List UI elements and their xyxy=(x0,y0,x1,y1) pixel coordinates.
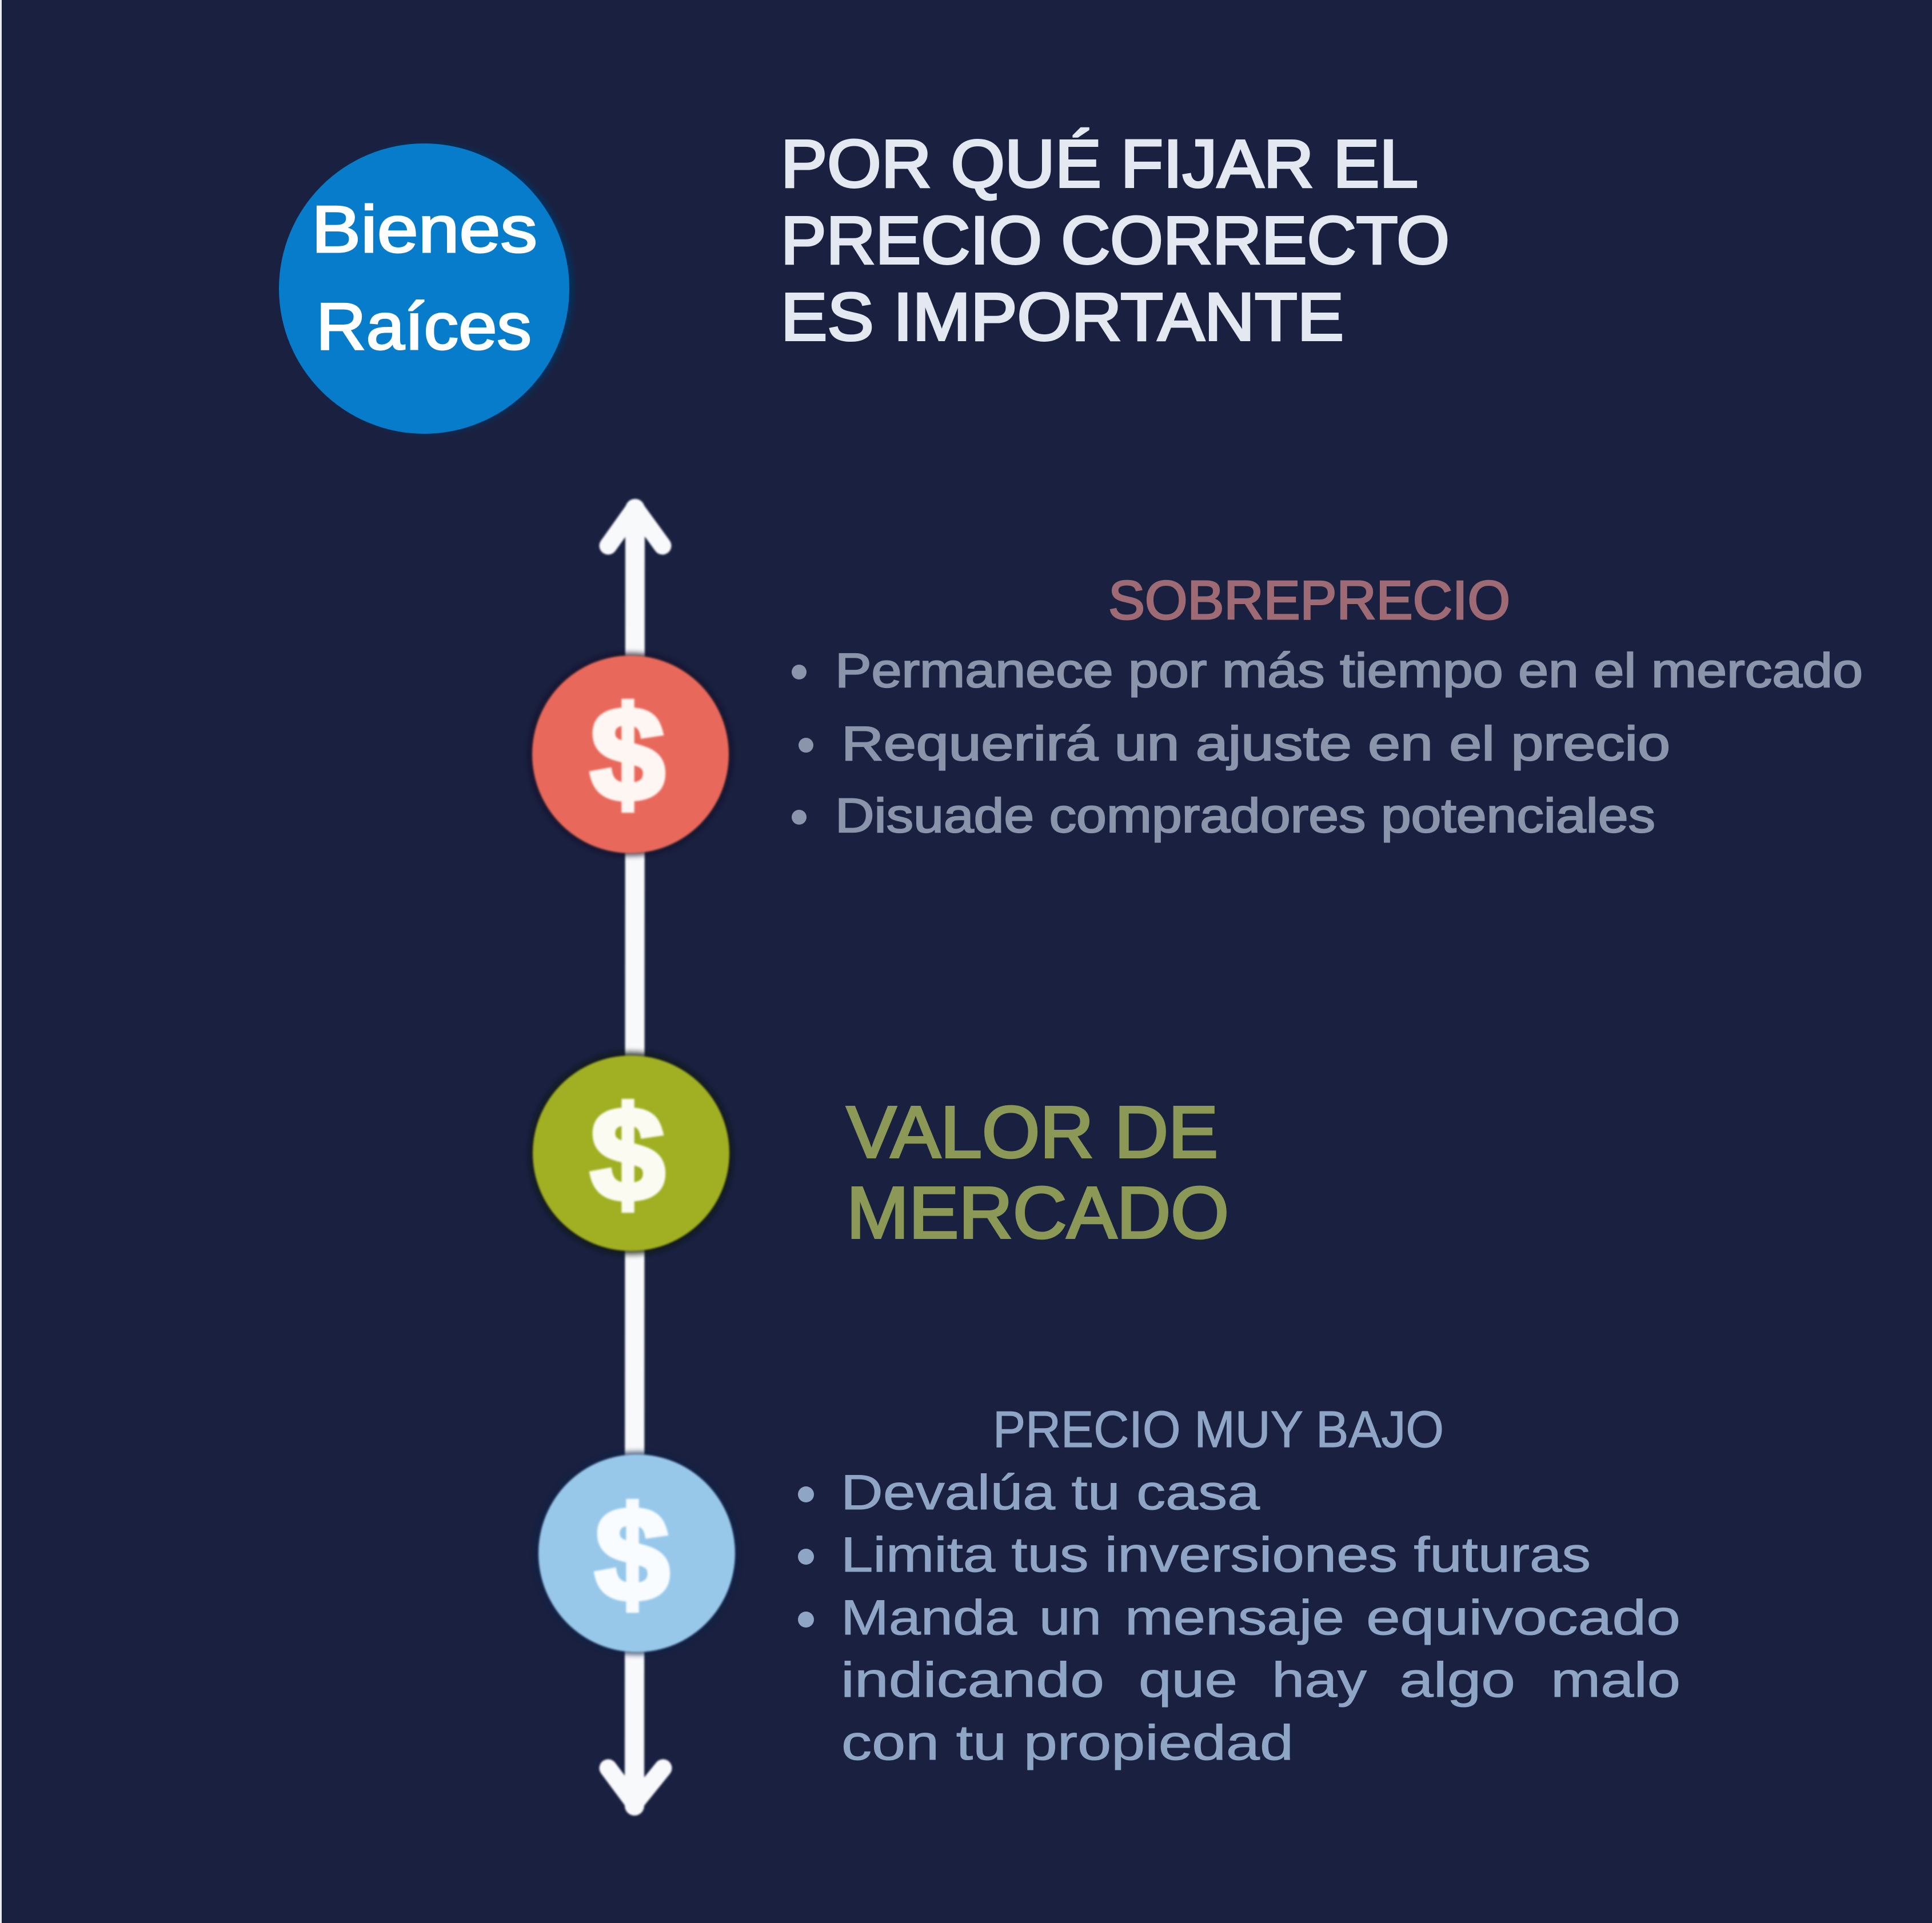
list: effects of underpricing: indicando xyxy=(841,1653,1104,1708)
logo badge: Bienes Raíces: Bienes xyxy=(312,192,537,266)
marker: red dollar: $ xyxy=(590,681,665,829)
title xyxy=(781,126,1450,355)
heading: valor de mercado: MERCADO xyxy=(847,1172,1229,1254)
list: effects of underpricing xyxy=(798,1465,1680,1770)
logo badge: Bienes Raíces: Raíces xyxy=(316,289,532,363)
list: effects of underpricing: que xyxy=(1139,1653,1238,1708)
heading: valor de mercado: VALOR DE xyxy=(847,1092,1218,1173)
heading: sobreprecio: SOBREPRECIO xyxy=(1108,570,1510,631)
title: POR QUÉ FIJAR EL xyxy=(781,126,1418,202)
panel: precio muy bajo xyxy=(798,1401,1680,1770)
list: effects of underpricing: con tu propiedad xyxy=(841,1716,1294,1770)
logo badge: Bienes Raíces xyxy=(279,143,573,434)
list: effects of underpricing: Devalúa tu casa xyxy=(841,1465,1260,1520)
title: ES IMPORTANTE xyxy=(781,279,1344,355)
list: effects of overpricing: Requerirá un ajuste en el precio xyxy=(841,717,1670,770)
list: effects of underpricing: hay xyxy=(1272,1653,1367,1708)
list: effects of underpricing: Manda xyxy=(841,1590,1017,1645)
marker: green dollar xyxy=(530,1052,732,1254)
list: effects of overpricing: Disuade compradores potenciales xyxy=(835,789,1655,842)
list: effects of overpricing: Permanece por más tiempo en el mercado xyxy=(835,643,1863,697)
list: effects of underpricing: Limita tus inversiones futuras xyxy=(841,1528,1591,1582)
panel: sobreprecio xyxy=(792,570,1863,842)
list: effects of underpricing: equivocado xyxy=(1366,1590,1680,1645)
marker: blue dollar: $ xyxy=(595,1481,669,1629)
list: effects of underpricing: mensaje xyxy=(1125,1590,1344,1645)
list: effects of underpricing: algo xyxy=(1399,1653,1515,1708)
list: effects of underpricing: malo xyxy=(1551,1653,1680,1708)
price axis: double arrow with dollar markers xyxy=(529,508,738,1806)
arrow: vertical shaft with up and down heads xyxy=(608,508,663,1806)
title: PRECIO CORRECTO xyxy=(781,203,1450,278)
list: effects of overpricing xyxy=(792,643,1863,842)
marker: red dollar xyxy=(529,653,732,855)
list: effects of underpricing: un xyxy=(1039,1590,1101,1645)
marker: green dollar: $ xyxy=(590,1081,665,1229)
heading: valor de mercado xyxy=(847,1092,1229,1254)
heading: precio muy bajo: PRECIO MUY BAJO xyxy=(993,1401,1444,1458)
marker: blue dollar xyxy=(536,1452,738,1654)
